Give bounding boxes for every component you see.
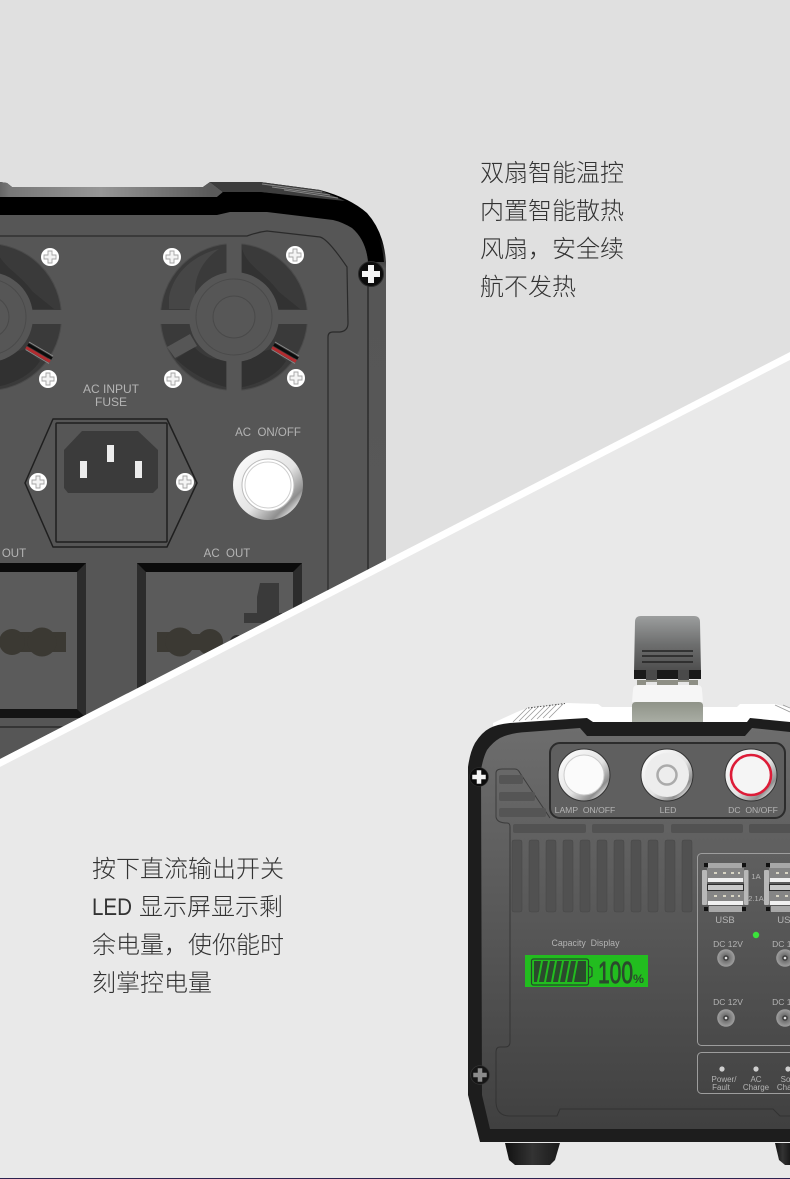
label: AC on/off: AC ON/OFF xyxy=(235,427,301,439)
panel: upper device rear view with fans xyxy=(0,182,386,800)
button panel xyxy=(550,743,785,818)
panel: status indicators: Fault xyxy=(712,1083,731,1092)
DC ports: DC 12V xyxy=(713,939,743,949)
label: 1A: 1A xyxy=(751,872,761,881)
device front face xyxy=(481,728,790,1129)
text block: DC switch description: 刻掌控电量 xyxy=(92,970,212,997)
panel: status indicators: AC xyxy=(750,1075,762,1084)
right edge strip line xyxy=(367,286,369,570)
label: AC input fuse xyxy=(83,384,139,406)
horizontal slots xyxy=(513,824,790,833)
text block: DC switch description: LED xyxy=(92,894,132,921)
background: upper light grey area xyxy=(0,0,790,770)
text block: DC switch description: 按下直流输出开关 xyxy=(92,856,284,883)
LCD battery display xyxy=(525,955,648,990)
label: AC out left: OUT xyxy=(2,548,26,560)
panel: status indicators xyxy=(698,1052,790,1094)
icon: fuse hexagon plate with C14 inlet xyxy=(25,419,197,547)
left vent slots xyxy=(496,769,550,827)
fan mounting screws xyxy=(39,246,305,388)
battery percentage: 100 xyxy=(598,955,633,990)
label: capacity display: Capacity Display xyxy=(552,938,620,948)
foot left xyxy=(505,1143,560,1165)
socket: right AC outlet xyxy=(137,563,302,688)
label: AC input fuse: FUSE xyxy=(95,395,127,409)
text block: dual fan description: 双扇智能温控 xyxy=(480,160,624,187)
bottom edge line xyxy=(0,1178,790,1179)
panel: USB and DC port group xyxy=(698,854,790,1046)
text block: dual fan description: 风扇，安全续 xyxy=(480,236,624,263)
icon: USB port left xyxy=(702,863,748,912)
text block: DC switch description xyxy=(92,856,284,997)
inner contour line xyxy=(496,827,790,1116)
panel: status indicators: Charge xyxy=(743,1083,770,1092)
text block: dual fan description: 内置智能散热 xyxy=(480,198,624,225)
icon: AC power button xyxy=(233,450,303,520)
label: USB left: USB xyxy=(715,915,735,926)
icon: DC button with red ring xyxy=(725,749,777,801)
DC ports xyxy=(713,939,790,1027)
icon: left cooling fan xyxy=(0,242,63,392)
text block: dual fan description xyxy=(480,160,624,301)
panel: status indicators: Power/ xyxy=(712,1075,737,1084)
label: AC input fuse: AC INPUT xyxy=(83,382,140,396)
label: 2.1A: 2.1A xyxy=(748,894,764,903)
label: DC on/off: DC ON/OFF xyxy=(728,805,778,815)
black top band xyxy=(217,192,384,262)
main face of device xyxy=(0,212,368,800)
divider: white diagonal band xyxy=(0,352,790,767)
background: lower grey area xyxy=(0,360,790,1179)
socket: left AC outlet xyxy=(0,563,86,727)
vertical slots xyxy=(512,840,692,912)
DC ports: DC 12V xyxy=(713,997,743,1007)
handle latch top xyxy=(634,616,701,683)
label: LED: LED xyxy=(660,805,676,815)
icon: lamp button xyxy=(558,749,610,801)
top rim highlight xyxy=(0,182,223,197)
top shell vent lines xyxy=(513,704,790,722)
icon: USB port right xyxy=(764,863,790,912)
text block: DC switch description: 显示屏显示剩 xyxy=(139,894,283,921)
icon: dark screw lower xyxy=(471,1066,489,1084)
text block: dual fan description: 航不发热 xyxy=(480,274,576,301)
device outer black shell xyxy=(468,718,790,1142)
foot right xyxy=(775,1143,790,1165)
battery icon xyxy=(532,959,592,985)
handle clip base xyxy=(631,680,704,722)
white top shell xyxy=(493,703,790,732)
icon: black corner screw xyxy=(358,262,384,286)
top right rim with vent lines xyxy=(210,182,345,201)
label: AC out right: AC OUT xyxy=(204,548,250,560)
device body silhouette xyxy=(0,182,386,800)
icon: black screw upper xyxy=(470,768,488,786)
inner panel outline xyxy=(0,231,348,600)
text block: DC switch description: 余电量，使你能时 xyxy=(92,932,284,959)
panel: lower device front view xyxy=(468,616,790,1165)
rim vent stripes xyxy=(262,184,338,198)
icon: right cooling fan xyxy=(159,242,309,392)
icon: LED button xyxy=(641,749,693,801)
indicator: green LED xyxy=(753,932,759,938)
label: lamp on/off: LAMP ON/OFF xyxy=(555,805,615,815)
percent sign: % xyxy=(633,972,644,986)
